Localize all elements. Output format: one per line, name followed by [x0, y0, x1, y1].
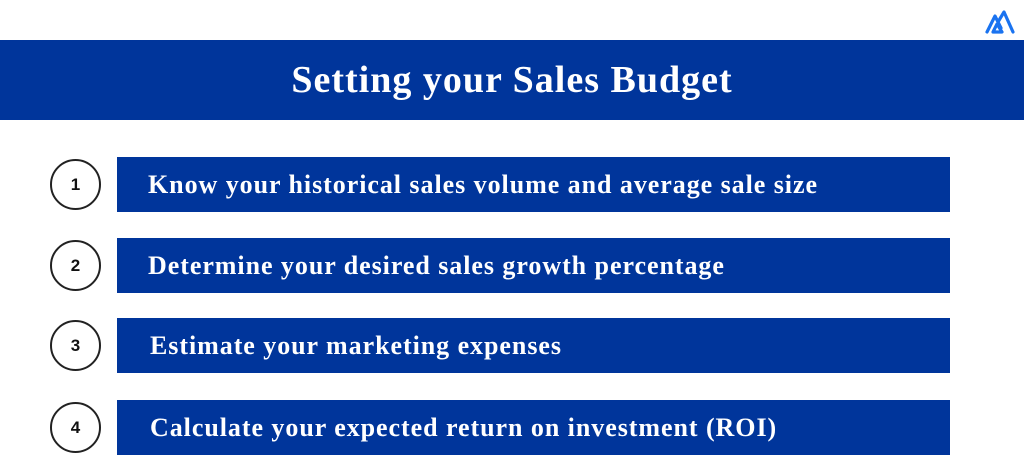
- step 3: [50, 318, 950, 373]
- circle 2: 2: [71, 256, 80, 275]
- bar 1: Know your historical sales volume and average sale size: [148, 170, 818, 199]
- bar 2: [117, 238, 950, 293]
- circle 4: 4: [71, 418, 80, 437]
- circle 1: [50, 159, 101, 210]
- title: [0, 40, 1024, 120]
- bar 2: Determine your desired sales growth percentage: [148, 251, 725, 280]
- bar 3: [117, 318, 950, 373]
- circle 2: [50, 240, 101, 291]
- circle 3: 3: [71, 336, 80, 355]
- bar 4: Calculate your expected return on investment (ROI): [150, 413, 777, 442]
- step 2: [50, 238, 950, 293]
- bar 1: [117, 157, 950, 212]
- circle 4: [50, 402, 101, 453]
- bar 3: Estimate your marketing expenses: [150, 331, 562, 360]
- step 1: [50, 157, 950, 212]
- bar 4: [117, 400, 950, 455]
- circle 1: 1: [71, 175, 80, 194]
- circle 3: [50, 320, 101, 371]
- step 4: [50, 400, 950, 455]
- logo: [985, 10, 1015, 34]
- title: Setting your Sales Budget: [291, 59, 733, 101]
